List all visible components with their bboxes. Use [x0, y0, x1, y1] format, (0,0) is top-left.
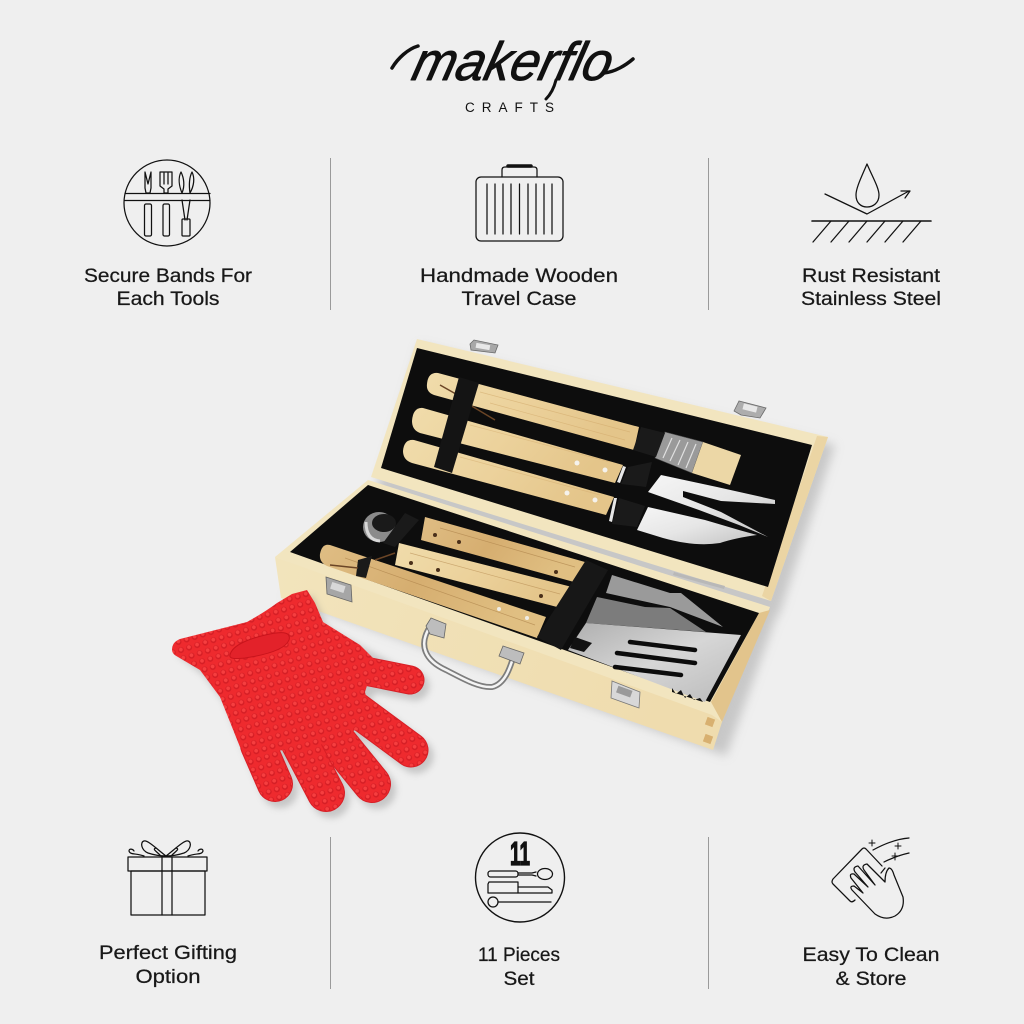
- base tray rim: [275, 480, 770, 722]
- lid outer frame: [371, 339, 828, 601]
- base inner black lining: [290, 485, 759, 702]
- band across lid handles: [434, 377, 479, 473]
- spatula head: [568, 623, 741, 702]
- front latch right: [611, 681, 640, 708]
- handle: basting brush: [427, 373, 639, 450]
- base front face: [275, 557, 722, 750]
- bolster strips: [609, 466, 626, 522]
- lid right edge: [762, 436, 828, 601]
- label: perfect gifting: Option: [136, 966, 200, 988]
- label: secure bands: Secure Bands For: [84, 265, 253, 287]
- icon: gift box: [128, 841, 207, 915]
- label: rust resistant: Rust Resistant: [802, 265, 941, 287]
- icon: water drop on steel surface: [812, 164, 931, 242]
- label: handmade case: Travel Case: [462, 288, 576, 310]
- tongs lower arm: [586, 597, 706, 632]
- label: 11 pieces: Set: [504, 968, 535, 990]
- band at ring: [383, 513, 419, 547]
- label: perfect gifting: Perfect Gifting: [99, 942, 237, 964]
- icon: hand wiping with cloth: [832, 838, 909, 918]
- brush band: [633, 427, 665, 457]
- logo: makerflo crafts: [392, 31, 633, 115]
- label: 11 pieces: [478, 944, 560, 990]
- wide band over base handles: [537, 560, 608, 650]
- logo: makerflo crafts: CRAFTS: [465, 100, 554, 115]
- icon: 11 pieces: 11: [510, 835, 530, 872]
- handle: knife: [403, 440, 614, 515]
- ring scraper: [363, 512, 396, 542]
- label: rust resistant: [801, 265, 941, 310]
- label: handmade case: Handmade Wooden: [420, 265, 618, 287]
- carry handle: [424, 618, 524, 687]
- base handle: spatula: [320, 545, 546, 638]
- divider bottom right: [708, 837, 709, 989]
- divider bottom left: [330, 837, 331, 989]
- silicone glove: [172, 590, 416, 799]
- fork blade: [648, 475, 775, 537]
- product: open wooden BBQ tool case: [275, 339, 835, 756]
- glove palm: [172, 590, 375, 752]
- glove smooth palm oval: [230, 633, 289, 659]
- case shadow: [285, 345, 835, 756]
- label: secure bands: [84, 265, 253, 310]
- label: easy to clean: [802, 944, 940, 990]
- divider top right: [708, 158, 709, 310]
- fork band: [621, 462, 652, 487]
- front latch left: [326, 577, 352, 602]
- label: perfect gifting: [99, 942, 237, 988]
- icon: 11 pieces: [476, 833, 564, 922]
- icon: tools held by a band: [124, 160, 210, 246]
- base handle: middle tongs: [395, 543, 572, 608]
- lid latch right: [734, 401, 766, 418]
- handle: fork: [412, 408, 623, 483]
- lid latch left: [470, 340, 498, 353]
- label: handmade case: [420, 265, 618, 310]
- label: rust resistant: Stainless Steel: [801, 288, 941, 310]
- knife blade: [637, 507, 757, 544]
- dovetail joints: [703, 717, 715, 744]
- icon: wooden travel case: [476, 166, 563, 241]
- lid inner black lining: [381, 348, 812, 587]
- glove shadow: [177, 596, 416, 799]
- brush ferrule: [655, 432, 703, 473]
- hinge strips: [404, 488, 725, 589]
- label: easy to clean: Easy To Clean: [802, 944, 940, 966]
- label: secure bands: Each Tools: [116, 288, 220, 310]
- base right inner wall: [711, 610, 770, 722]
- logo: makerflo crafts: makerflo: [407, 31, 620, 92]
- divider top left: [330, 158, 331, 310]
- base handle: upper tongs: [421, 517, 585, 582]
- knife band: [612, 498, 645, 527]
- label: easy to clean: & Store: [836, 968, 906, 990]
- brush bristles: [692, 442, 741, 485]
- glove fingers: [258, 668, 411, 793]
- tongs upper arm: [606, 575, 723, 627]
- band at left handle: [330, 553, 395, 578]
- label: 11 pieces: 11 Pieces: [478, 944, 560, 966]
